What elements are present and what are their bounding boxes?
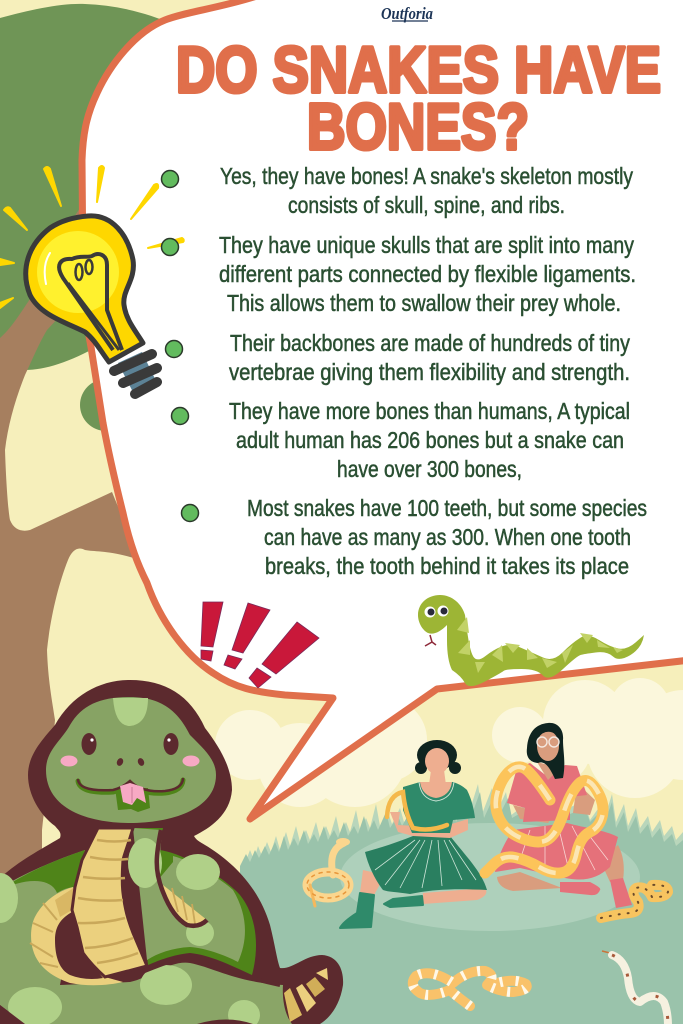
arms <box>390 812 468 838</box>
skirt <box>365 836 487 894</box>
nostrils <box>116 757 145 767</box>
snake eyes <box>424 606 448 618</box>
bulb rays <box>0 166 184 308</box>
bullet dots <box>162 170 198 522</box>
icon: light bulb <box>0 166 184 396</box>
small snake: white bottom right <box>602 951 668 1024</box>
logo: Outforia <box>381 4 433 23</box>
text block: skeleton <box>220 163 633 218</box>
small snake: coiled left <box>307 838 350 906</box>
belly <box>72 828 147 977</box>
coil divider <box>110 960 280 985</box>
legs and feet <box>340 870 486 928</box>
body silhouette <box>0 680 343 1024</box>
text block: bone count <box>229 398 630 482</box>
grass back layer <box>244 784 683 880</box>
glasses <box>537 737 559 747</box>
blouse <box>507 763 587 822</box>
girl in green dress <box>340 740 487 928</box>
text block: skeleton: consists of skull, spine, and ribs. <box>288 192 565 218</box>
skirt pleats <box>375 840 476 888</box>
blouse <box>403 782 475 833</box>
small snake: spotted right <box>601 885 668 918</box>
head and hair <box>527 723 564 779</box>
arms <box>513 805 553 823</box>
skirt pleats <box>520 825 608 875</box>
speech bubble <box>82 0 683 819</box>
exclamation marks <box>201 602 319 688</box>
text block: bone count: have over 300 bones, <box>337 456 522 482</box>
green snake on bubble <box>418 595 644 686</box>
tree foliage <box>0 4 175 431</box>
tree trunk <box>0 202 140 900</box>
arm <box>157 830 207 926</box>
left belly loop <box>30 887 123 985</box>
girl in pink dress <box>485 723 632 908</box>
title: BONES? <box>307 90 529 163</box>
large yellow snake <box>485 767 603 873</box>
text block: backbones <box>229 330 630 385</box>
head <box>46 697 216 823</box>
text block: teeth: breaks, the tooth behind it takes its place <box>265 553 629 579</box>
text block: backbones: vertebrae giving them flexibility and strength. <box>229 359 630 385</box>
legs and feet <box>497 845 632 908</box>
back pattern <box>457 617 623 673</box>
clouds <box>215 678 683 807</box>
mouth <box>78 779 183 812</box>
grassy ground <box>240 792 683 1024</box>
rattle <box>284 968 328 1022</box>
text block: bone count: adult human has 206 bones but a snake can <box>236 427 624 453</box>
text block: skulls: This allows them to swallow their prey whole. <box>227 290 621 316</box>
upper coil <box>133 828 256 975</box>
title <box>176 33 661 163</box>
held snake <box>387 792 447 829</box>
head and hair <box>415 740 461 785</box>
skirt <box>495 823 618 880</box>
cheeks <box>60 756 200 766</box>
big cartoon snake <box>0 680 343 1024</box>
text block: skulls <box>219 232 636 316</box>
small snake: striped bottom <box>413 971 527 1006</box>
text block: skulls: different parts connected by flexible ligaments. <box>219 261 636 287</box>
coil body <box>0 850 292 1024</box>
text block: teeth <box>247 495 647 579</box>
coil spots <box>0 838 260 1024</box>
eyes <box>82 733 178 755</box>
